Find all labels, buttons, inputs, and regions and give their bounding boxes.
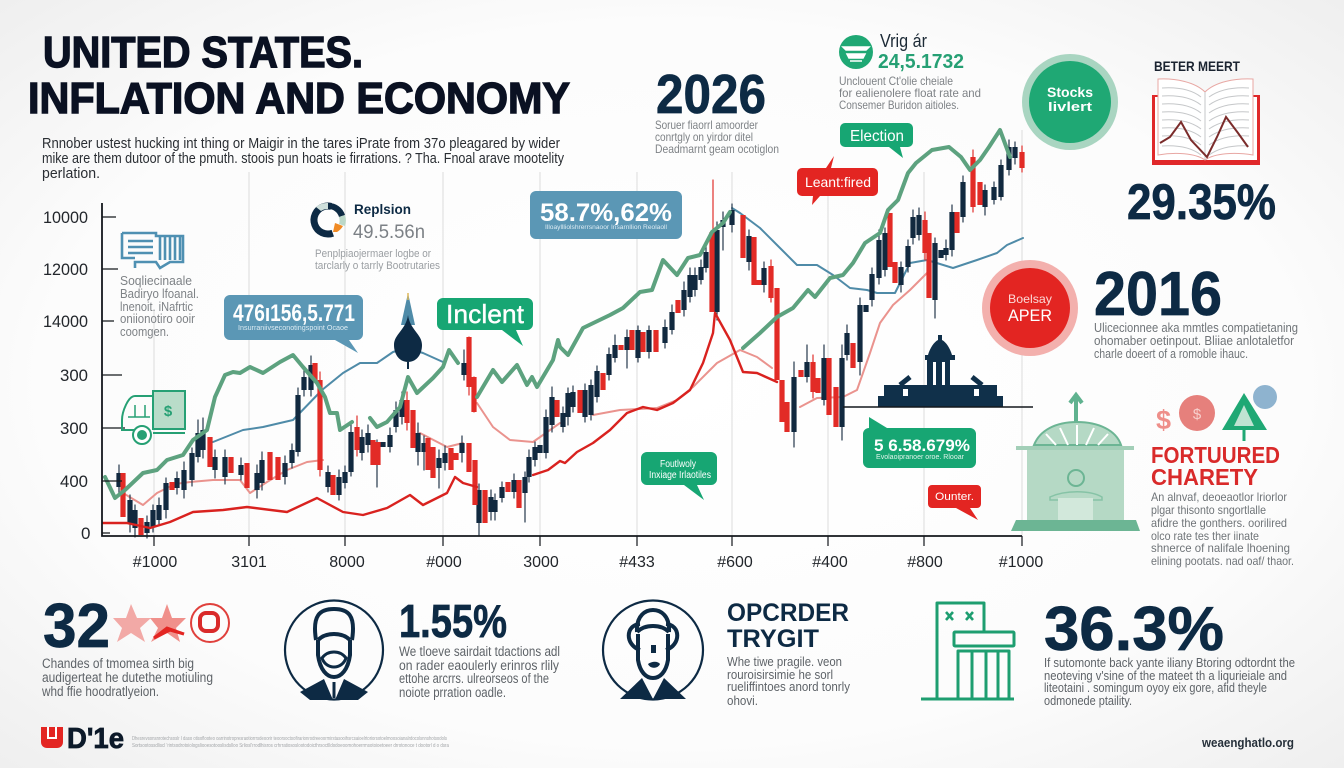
- note: fortuured charety: [1151, 490, 1294, 568]
- note: 36.3%: [1044, 655, 1295, 708]
- candlestick and line chart: [103, 130, 1023, 538]
- x axis labels: [133, 554, 1043, 571]
- stat: 32 with icons: [43, 592, 229, 661]
- chart axes: [102, 203, 1022, 546]
- navy candle bodies: [119, 147, 1015, 533]
- footer fine print: [132, 736, 449, 749]
- x axis labels: #1000: [999, 554, 1043, 571]
- icon: news chat: [122, 233, 183, 268]
- badge: aper: [982, 260, 1078, 356]
- note: vrig ar: Unclouent Ct'olie cheiale: [839, 74, 953, 88]
- title: INFLATION AND ECONOMY: [28, 74, 570, 123]
- blue trend line: [213, 208, 1023, 442]
- note: 2016: charle doeert of a romoble ihauc.: [1094, 347, 1248, 361]
- x axis labels: 3000: [523, 554, 559, 571]
- callout: green percent: 5 6.58.679%: [874, 436, 970, 455]
- title: UNITED STATES.: [43, 28, 363, 77]
- candle wicks: [119, 140, 1015, 538]
- y axis labels: [43, 208, 90, 543]
- red candle wicks: [320, 146, 1022, 476]
- callout: red note: Ounter.: [935, 491, 974, 503]
- note: 32: Chandes of tmomea sirth big: [42, 656, 194, 671]
- red trend line: [103, 313, 777, 528]
- callout: blue percent: 58.7%,62%: [540, 199, 672, 227]
- y axis labels: 14000: [43, 312, 88, 331]
- callout: blue figure: 476ı156,5.771: [233, 300, 355, 327]
- note: fortuured charety: An alnvaf, deoeaotlor lriorlor: [1151, 490, 1287, 504]
- stat: 32 with icons: 32: [43, 592, 110, 661]
- chart gridlines: [154, 130, 1022, 536]
- note: 1.55%: [399, 644, 560, 700]
- note: 32: audigerteat he dutethe motiuling: [42, 670, 213, 685]
- logo: [41, 723, 124, 755]
- donut stat: Replsion: [354, 202, 411, 217]
- callout: green percent: Evolaoipranoer oroe. Rlooar: [876, 454, 965, 461]
- note: fortuured charety: shnerce of nalifale lhoening: [1151, 541, 1290, 555]
- callout: green note: Foutlwoly: [660, 459, 696, 470]
- note: 2016: ohomaber oetinpout. Bliiae anlotaletfor: [1094, 334, 1294, 348]
- note: 2026: [655, 118, 779, 156]
- y axis labels: 12000: [43, 260, 88, 279]
- intro paragraph: perlation.: [42, 166, 100, 182]
- note: fortuured charety: plgar thisonto sngortlalle: [1151, 503, 1266, 517]
- callout: green note: [641, 452, 717, 500]
- footer fine print: Dhesrevsonsnrotechsoslr I daso otisoflooteo oarrinotropresraotiorrrsdeoorir teoorsoctoofirarionrodreeoormirstasooihsrcsaioelrtoriorsotoelmoosoianalrdocolsnnshotsodols: [132, 736, 447, 742]
- left note: lnenoit. iNafrtic: [120, 299, 193, 314]
- x axis labels: 3101: [231, 554, 267, 571]
- badge: stocks: Iivlert: [1048, 99, 1093, 114]
- donut stat: [310, 202, 425, 243]
- icon: man portrait: [285, 600, 383, 700]
- callout: green percent: [863, 417, 976, 468]
- icon: oil drop: [394, 293, 422, 369]
- icon: navy capitol: [843, 335, 1033, 407]
- left note: [120, 273, 199, 339]
- callout: blue percent: Illoayllliolshrerrsnaoor Insarnllion Reolaoll: [545, 224, 668, 231]
- logo: D'1e: [67, 723, 124, 755]
- icons: finance symbols: $: [1156, 405, 1171, 435]
- note: 1.55%: noiote prration oadle.: [399, 685, 506, 700]
- note: 36.3%: liteotaini . somingum oyoy eix gore, afid theyle: [1044, 680, 1267, 695]
- icon: green badge: [839, 35, 873, 69]
- title: [28, 28, 570, 123]
- y axis labels: 300: [60, 366, 88, 385]
- intro paragraph: Rnnober ustest hucking int thing or Maigir in the tares iPrate from 37o pleagared by wider: [42, 136, 560, 152]
- note: fortuured charety: olco rate tes ther iinate: [1151, 529, 1259, 543]
- callout: red: [797, 156, 878, 205]
- note: vrig ar: Consemer Buridon aitioles.: [839, 98, 959, 112]
- stat: 29.35%: 29.35%: [1127, 174, 1276, 230]
- note: opcrder trygit: rueliffintoes anord tonrly: [727, 679, 850, 694]
- stat: 2026: 2026: [656, 63, 766, 125]
- note: 2016: Ulicecionnee aka mmtles compatietaning: [1094, 321, 1298, 335]
- intro paragraph: [42, 136, 565, 182]
- callout: blue figure: Insurraniivseconotingspoint Ocaoe: [238, 325, 348, 332]
- x axis labels: #800: [907, 554, 943, 571]
- book heading: BETER MEERT: [1154, 58, 1240, 74]
- heading: fortuured charety: CHARETY: [1151, 464, 1258, 490]
- intro paragraph: mike are them dutoor of the pmuth. stoois pun hoats ie firrations. ? Tha. Fnoal arave mootelity: [42, 151, 565, 167]
- badge: aper: APER: [1008, 306, 1052, 325]
- icon: money truck: $: [164, 403, 173, 420]
- heading: fortuured charety: FORTUURED: [1151, 442, 1280, 468]
- note: fortuured charety: afidre the gonthers. oorilired: [1151, 516, 1287, 530]
- callout: green note: Inxiage Irlaotiles: [649, 470, 711, 481]
- note: 36.3%: neoteving v'sine of the mateet th a liqurieiale and: [1044, 668, 1287, 683]
- donut note: tarclarly o tarrly Bootrutaries: [315, 260, 440, 272]
- icon: money truck: [122, 391, 185, 444]
- note: 2026: Deadmarnt geam ocotiglon: [655, 142, 779, 156]
- stat: vrig ar: 24,5.1732: [878, 51, 964, 73]
- callout: inclent: Inclent: [446, 299, 525, 329]
- badge: stocks: Stocks: [1047, 84, 1093, 100]
- badge: stocks: [1022, 54, 1118, 150]
- note: 2026: conrtgly on yirdor ditel: [655, 130, 753, 144]
- red candle bodies: [123, 152, 1022, 535]
- stat: 2016: 2016: [1094, 260, 1222, 329]
- heading: fortuured charety: [1151, 442, 1280, 490]
- y axis labels: 300: [60, 419, 88, 438]
- donut note: Penplpiaojermaer logbe or: [315, 248, 431, 260]
- note: 2016: [1094, 321, 1298, 361]
- callout: red: Leant:fired: [805, 174, 871, 190]
- note: 32: [41, 656, 213, 699]
- x axis labels: #600: [717, 554, 753, 571]
- x axis labels: #400: [812, 554, 848, 571]
- note: fortuured charety: elining pootats. nad oaf/ thaor.: [1151, 554, 1294, 568]
- icons: finance symbols: [1156, 385, 1277, 441]
- note: opcrder trygit: rouroisirsimie he sorl: [727, 667, 833, 682]
- icons: finance symbols: $: [1193, 406, 1202, 423]
- x axis labels: #000: [426, 554, 462, 571]
- note: vrig ar: [839, 74, 981, 112]
- heading: opcrder trygit: OPCRDER: [727, 599, 849, 627]
- left note: coomgen.: [120, 324, 169, 339]
- heading: opcrder trygit: TRYGIT: [727, 625, 819, 653]
- callout: inclent: [437, 298, 533, 346]
- footer fine print: Sortsootossdliscl 'rintsodrotoiologsliooesotooslisdslloo Srliosl'rrodlhisros crhrratiososlootodoicthrsoctlldodoeoomohoerrmsotoioetoeer drrotonoce t dootorl d o dsra: [132, 743, 449, 749]
- donut stat: 49.5.56n: [353, 222, 425, 243]
- stat: vrig ar: [878, 31, 964, 73]
- callout: blue percent: [530, 191, 682, 239]
- note: 1.55%: on rader eaoulerly erinros rlily: [399, 658, 559, 673]
- note: 2026: Soruer fiaorrl amoorder: [655, 118, 758, 132]
- note: opcrder trygit: Whe tiwe pragile. veon: [727, 654, 842, 669]
- website: weaenghatlo.org: [1201, 736, 1294, 750]
- y axis labels: 0: [81, 524, 90, 543]
- stat: 36.3%: 36.3%: [1044, 595, 1224, 664]
- left note: oniionotiro ooir: [120, 311, 196, 326]
- icon: book with chart: [1152, 79, 1260, 165]
- left note: Badiryo lfoanal.: [120, 286, 199, 301]
- note: opcrder trygit: [727, 654, 850, 708]
- callout: blue figure: [224, 295, 363, 353]
- donut note: [315, 248, 440, 272]
- callout: election: Election: [850, 128, 904, 145]
- note: vrig ar: for ealienolere float rate and: [839, 86, 981, 100]
- stat: vrig ar: Vrig ár: [880, 31, 927, 51]
- stat: 1.55%: 1.55%: [399, 595, 507, 647]
- note: 32: whd ffie hoodratlyeion.: [41, 684, 159, 699]
- x axis labels: #433: [619, 554, 655, 571]
- note: 1.55%: We tloeve sairdait tdactions adl: [399, 644, 560, 659]
- icon: green bank: [1011, 395, 1140, 531]
- note: opcrder trygit: ohovi.: [727, 693, 758, 708]
- callout: red note: [928, 485, 981, 520]
- heading: opcrder trygit: [727, 599, 849, 653]
- note: 1.55%: ettohe arcrrs. ulreorseos of the: [399, 671, 549, 686]
- y axis labels: 10000: [43, 208, 88, 227]
- pink moving average line: [123, 273, 927, 505]
- x axis labels: #1000: [133, 554, 177, 571]
- icon: green building: [921, 603, 1014, 699]
- y axis labels: 400: [60, 472, 88, 491]
- badge: aper: Boelsay: [1008, 292, 1052, 306]
- green trend line: [105, 130, 1010, 498]
- x axis labels: 8000: [329, 554, 365, 571]
- left note: Soqliecinaale: [120, 273, 192, 288]
- callout: election: [840, 123, 913, 158]
- note: 36.3%: If sutomonte back yante iliany Btoring odtordnt the: [1044, 655, 1295, 670]
- note: 36.3%: odmonede ptaility.: [1044, 693, 1132, 708]
- icon: woman portrait: [603, 600, 703, 700]
